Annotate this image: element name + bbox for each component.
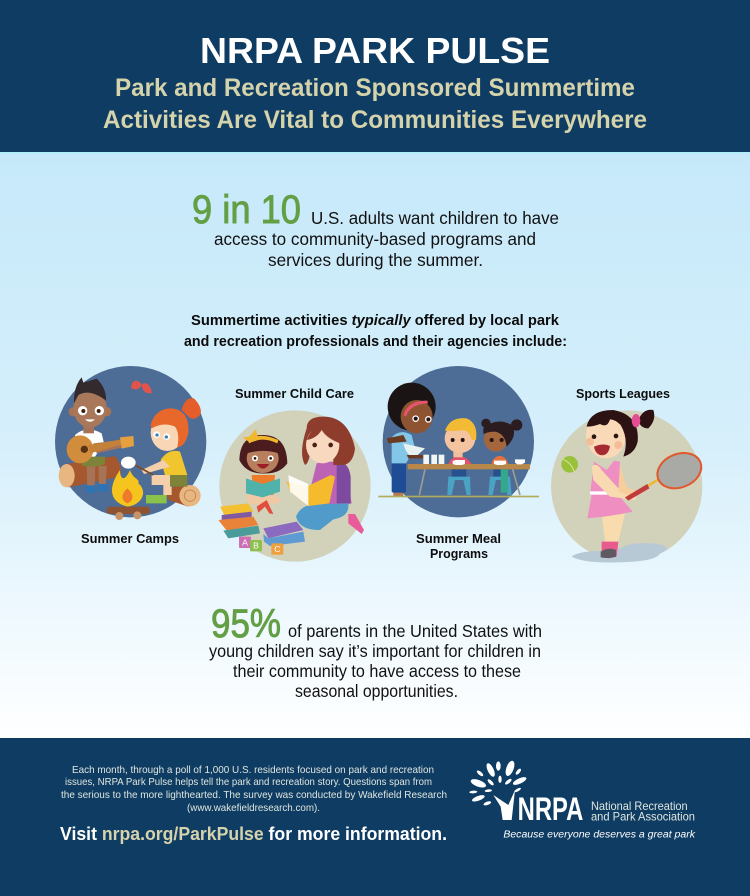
panel: header [0,0,750,154]
icon: tree [469,760,527,820]
text block: 95% statistic: 95% [211,602,281,646]
logo: NRPA: National Recreation [591,800,688,813]
figure: girl with bun [481,419,522,495]
icon: log left [59,456,121,487]
text block: 95% statistic: of parents in the United States with [288,621,542,641]
logo: NRPA: Because everyone deserves a great park [503,829,696,840]
icon: tennis racket [625,447,707,501]
text block: 95% statistic: their community to have access to these [233,661,521,681]
panel: page background [0,153,750,738]
text block: survey description: (www.wakefieldresearch.com). [187,802,320,814]
icon: tennis ball [561,456,578,473]
figure: boy with guitar [67,377,134,493]
icon: ground shadow [572,543,667,562]
figure: girl with marshmallow [121,398,201,503]
label: summer meal programs: Programs [430,547,488,561]
icon: campfire [107,470,150,520]
text block: survey description: the serious to the more lighthearted. The survey was conducted by Wakefield Research [61,789,447,801]
icon: butterfly [131,381,152,393]
text block: 9 in 10 statistic: services during the summer. [268,250,483,270]
heading: activities intro [184,313,567,350]
icon: alphabet blocks: A [242,537,248,547]
text block: survey description: issues, NRPA Park Pulse helps tell the park and recreation story. Questions span from [65,776,432,788]
label: summer meal programs: Summer Meal [416,532,501,546]
text block: 95% statistic [209,602,542,701]
icon: table [378,459,539,497]
title: NRPA PARK PULSE [200,30,550,71]
figure: girl with racket [586,410,654,558]
subtitle [103,74,647,134]
icon: alphabet blocks: C [274,544,280,554]
icon: book stack [218,503,260,538]
illustration: summer child care [218,410,371,562]
text block: 9 in 10 statistic: 9 in 10 [192,188,301,232]
heading: activities intro: Summertime activities typically offered by local park [191,313,560,329]
figure: woman pouring [387,383,436,497]
text block: 9 in 10 statistic: access to community-based programs and [214,229,536,249]
icon: milk glasses [423,455,444,464]
text block: 95% statistic: young children say it’s important for children in [209,641,541,661]
text block: survey description [61,764,447,814]
figure: woman reading [287,417,364,534]
illustration: summer camps [55,366,206,520]
icon: log right [165,485,201,507]
call to action: Visit nrpa.org/ParkPulse for more information. [60,824,447,844]
text block: 95% statistic: seasonal opportunities. [295,681,458,701]
illustration: sports leagues [551,410,707,562]
label: summer camps: Summer Camps [81,532,179,546]
heading: activities intro: and recreation professionals and their agencies include: [184,334,567,350]
label: summer child care: Summer Child Care [235,387,354,401]
label: sports leagues: Sports Leagues [576,387,670,401]
logo: NRPA [469,760,696,840]
subtitle: Activities Are Vital to Communities Everywhere [103,106,647,134]
icon: alphabet blocks [239,537,283,555]
subtitle: Park and Recreation Sponsored Summertime [115,74,635,102]
text block: survey description: Each month, through a poll of 1,000 U.S. residents focused on park and recreation [72,764,434,776]
panel: footer [0,738,750,896]
figure: blond boy [445,418,476,495]
logo: NRPA: NRPA [518,791,583,827]
icon: books right [263,522,305,546]
text block: 9 in 10 statistic: U.S. adults want children to have [311,208,559,228]
illustration: summer meal programs [378,366,539,517]
logo: NRPA: and Park Association [591,810,695,823]
icon: alphabet blocks: B [253,541,259,551]
text block: 9 in 10 statistic [192,188,559,270]
label: summer meal programs [416,532,501,561]
figure: girl reading [239,429,287,514]
